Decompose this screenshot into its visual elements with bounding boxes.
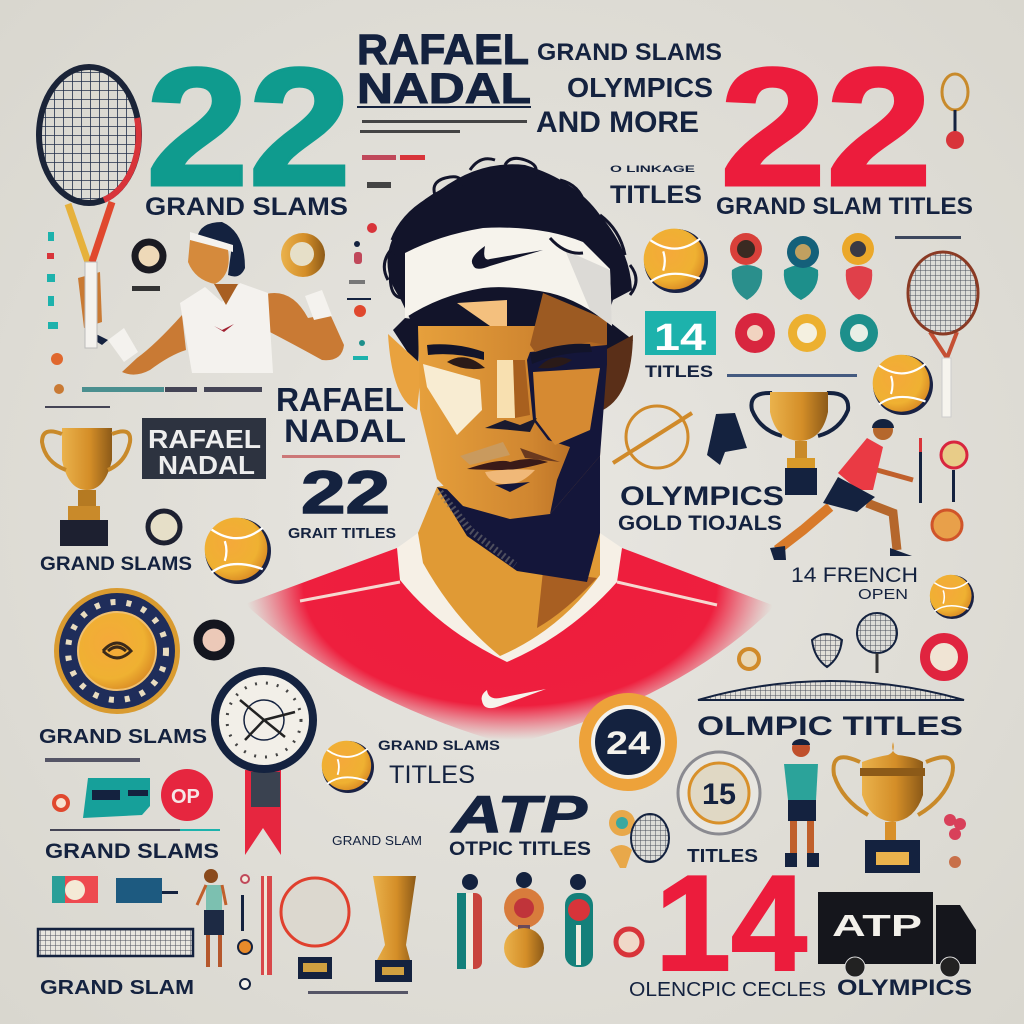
stat: 14 titles: TITLES [645, 362, 713, 381]
label: grait titles: GRAIT TITLES [288, 525, 396, 542]
caption strip [45, 758, 140, 762]
icons: small column [238, 875, 252, 989]
shirt [245, 548, 775, 745]
racket right [908, 252, 978, 417]
rackets small [739, 613, 963, 676]
big number: red 14: 14 [655, 847, 807, 999]
face [418, 326, 607, 519]
label: titles: O LINKAGE [610, 164, 695, 174]
truck [818, 892, 976, 977]
stat: 22: 22 [301, 459, 390, 526]
subtitle: OLYMPICS [567, 72, 713, 103]
badge 15: 15 [702, 778, 736, 811]
label: grand slam titles: GRAND SLAM TITLES [716, 193, 973, 220]
label: olencpic cecles: OLENCPIC CECLES [629, 979, 826, 1001]
racket mini [609, 810, 669, 868]
icon: ball [205, 518, 271, 584]
label: grand slam: GRAND SLAM [40, 977, 194, 999]
label: olympics gold medals [618, 481, 784, 535]
icon: racket top left [39, 67, 139, 262]
nike swoosh shirt [482, 689, 546, 708]
icons: small column center-left [347, 223, 377, 360]
coin row [735, 313, 878, 353]
label: olympics gold medals: OLYMPICS [620, 481, 784, 511]
icon: small badge [949, 856, 961, 868]
label: grand slams titles: GRAND SLAMS [378, 737, 500, 753]
icon: ring [198, 624, 230, 656]
badge 15 [678, 752, 760, 834]
label: olympics: OLYMPICS [837, 975, 972, 1000]
stat: 14 titles [645, 311, 716, 381]
big number: teal 22: 22 [146, 33, 351, 221]
trophy left [42, 428, 130, 546]
ball center-left [322, 741, 374, 793]
label: 14 french open [791, 564, 918, 603]
small caption lines [360, 120, 527, 188]
player photo top left [78, 222, 344, 375]
badge 24: 24 [606, 725, 650, 761]
caption [727, 374, 857, 377]
icon: dark emblem [707, 413, 747, 465]
mouth [460, 442, 510, 465]
ATP logo: ATP [449, 786, 587, 844]
label: Rafael Nadal box: RAFAEL [148, 424, 261, 454]
icon: card and red circle [54, 769, 213, 821]
label: grand slams: GRAND SLAMS [40, 554, 192, 575]
neck [418, 456, 600, 656]
label: Rafael Nadal center-left [276, 381, 406, 458]
trophy bottom [373, 876, 416, 982]
label: 14 french open: OPEN [858, 586, 908, 603]
caption line [895, 236, 961, 239]
stat: 14 titles: 14 [654, 317, 706, 359]
plaque [298, 957, 332, 979]
figure small [197, 869, 226, 967]
portrait [245, 158, 775, 745]
trophy big right [834, 742, 953, 873]
icon row [730, 233, 874, 300]
icon: gold ring [281, 233, 325, 277]
label: Rafael Nadal box [142, 418, 266, 480]
icon: ring [616, 929, 642, 955]
icon: bow and arrow [613, 406, 692, 468]
badge 24 [579, 693, 677, 791]
icon: clock [215, 671, 313, 855]
medal badge [54, 588, 180, 714]
label: grand slams: GRAND SLAMS [45, 840, 219, 863]
disc [281, 878, 349, 946]
net dome [698, 681, 964, 700]
icon: ring [148, 511, 180, 543]
bottom row: flag and net [38, 876, 193, 956]
label: grand slams titles [378, 737, 500, 789]
title [357, 26, 531, 113]
label: otpic titles: OTPIC TITLES [449, 839, 591, 860]
label: Rafael Nadal center-left: RAFAEL [276, 381, 404, 418]
icon: card and red circle: OP [171, 786, 200, 808]
running player [770, 419, 913, 560]
hair [388, 164, 632, 340]
trophy right [751, 392, 848, 495]
big number: red 22: 22 [720, 33, 932, 221]
label: Rafael Nadal box: NADAL [158, 450, 255, 480]
title: RAFAEL [357, 26, 529, 74]
label: 14 french open: 14 FRENCH [791, 564, 918, 587]
icon: flower [944, 814, 966, 840]
collar [397, 533, 622, 662]
label: titles [610, 164, 702, 209]
strip ribbon [261, 876, 272, 975]
label: grand slams: GRAND SLAMS [39, 726, 207, 748]
headband [405, 228, 612, 326]
ball right [873, 355, 933, 415]
caption [308, 991, 408, 994]
label: olympic titles: OLMPIC TITLES [697, 711, 963, 741]
subtitle: AND MORE [536, 106, 699, 139]
label: titles: TITLES [610, 181, 702, 209]
ball right top [644, 229, 708, 293]
shirt stripes [300, 582, 717, 605]
icons far right [919, 438, 974, 619]
nike swoosh headband [472, 246, 543, 269]
icon: small racket top right [942, 74, 968, 149]
caption: GRAND SLAM [332, 833, 422, 848]
brows and eyes [427, 344, 484, 360]
subtitle: GRAND SLAMS [537, 39, 722, 66]
icon: ring [132, 242, 163, 291]
label: grand slams titles: TITLES [389, 761, 475, 789]
truck: ATP [832, 908, 922, 943]
nose tip [485, 418, 537, 432]
ears [393, 318, 420, 368]
label: olympics gold medals: GOLD TIOJALS [618, 512, 782, 535]
figurines [457, 872, 593, 969]
subtitle [536, 39, 722, 139]
player standing [784, 739, 819, 867]
label: Rafael Nadal center-left: NADAL [284, 413, 406, 449]
title: NADAL [357, 65, 531, 113]
far arm [266, 293, 344, 360]
icon: tick marks left [47, 232, 64, 394]
label: titles: TITLES [687, 846, 758, 866]
caption strip [45, 387, 262, 408]
label: grand slams: GRAND SLAMS [145, 193, 348, 221]
